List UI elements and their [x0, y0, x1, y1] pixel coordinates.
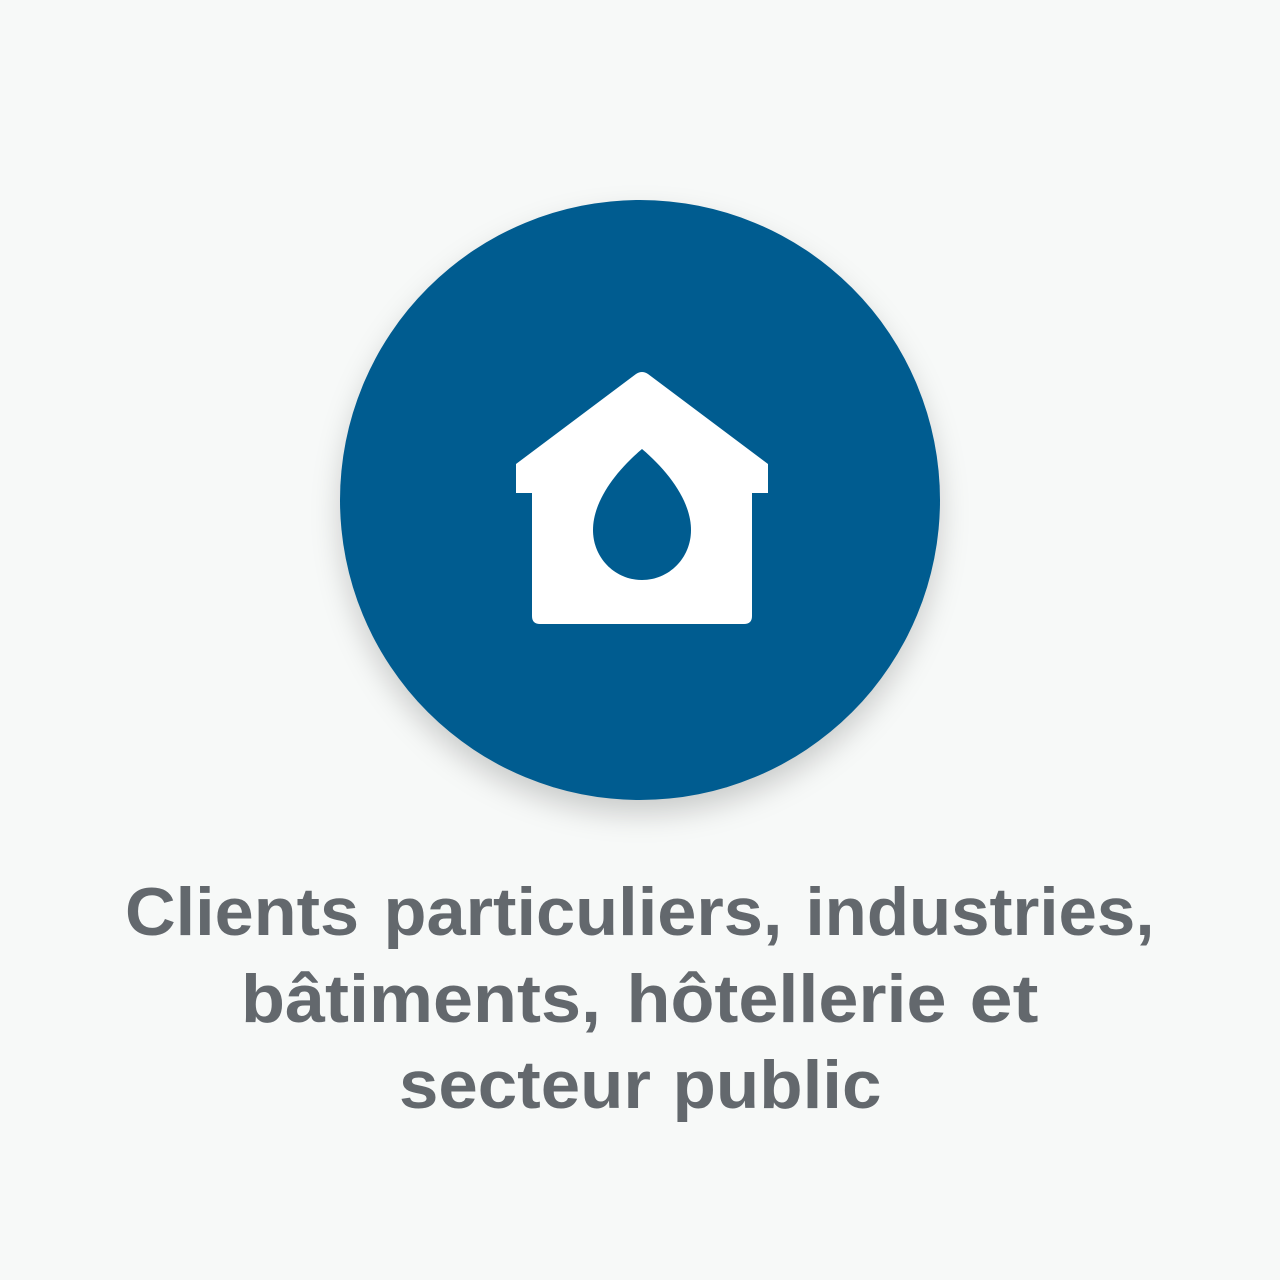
circle shadow	[340, 214, 940, 814]
caption line 3	[399, 1047, 882, 1123]
caption line 3: secteur	[399, 1047, 651, 1123]
caption line 1: Clients	[125, 874, 359, 950]
icon: house	[516, 372, 768, 624]
icon: house with water drop	[516, 372, 768, 624]
caption text	[125, 874, 1154, 1123]
blue circle badge	[340, 200, 940, 800]
caption line 1	[125, 874, 1154, 950]
caption line 2	[241, 961, 1038, 1037]
caption line 2: hôtellerie	[626, 961, 946, 1037]
caption line 1: industries,	[806, 874, 1154, 950]
caption line 1: particuliers,	[384, 874, 782, 950]
caption line 2: et	[970, 961, 1038, 1037]
caption line 2: bâtiments,	[241, 961, 601, 1037]
icon: water drop	[593, 449, 691, 580]
caption line 3: public	[672, 1047, 882, 1123]
